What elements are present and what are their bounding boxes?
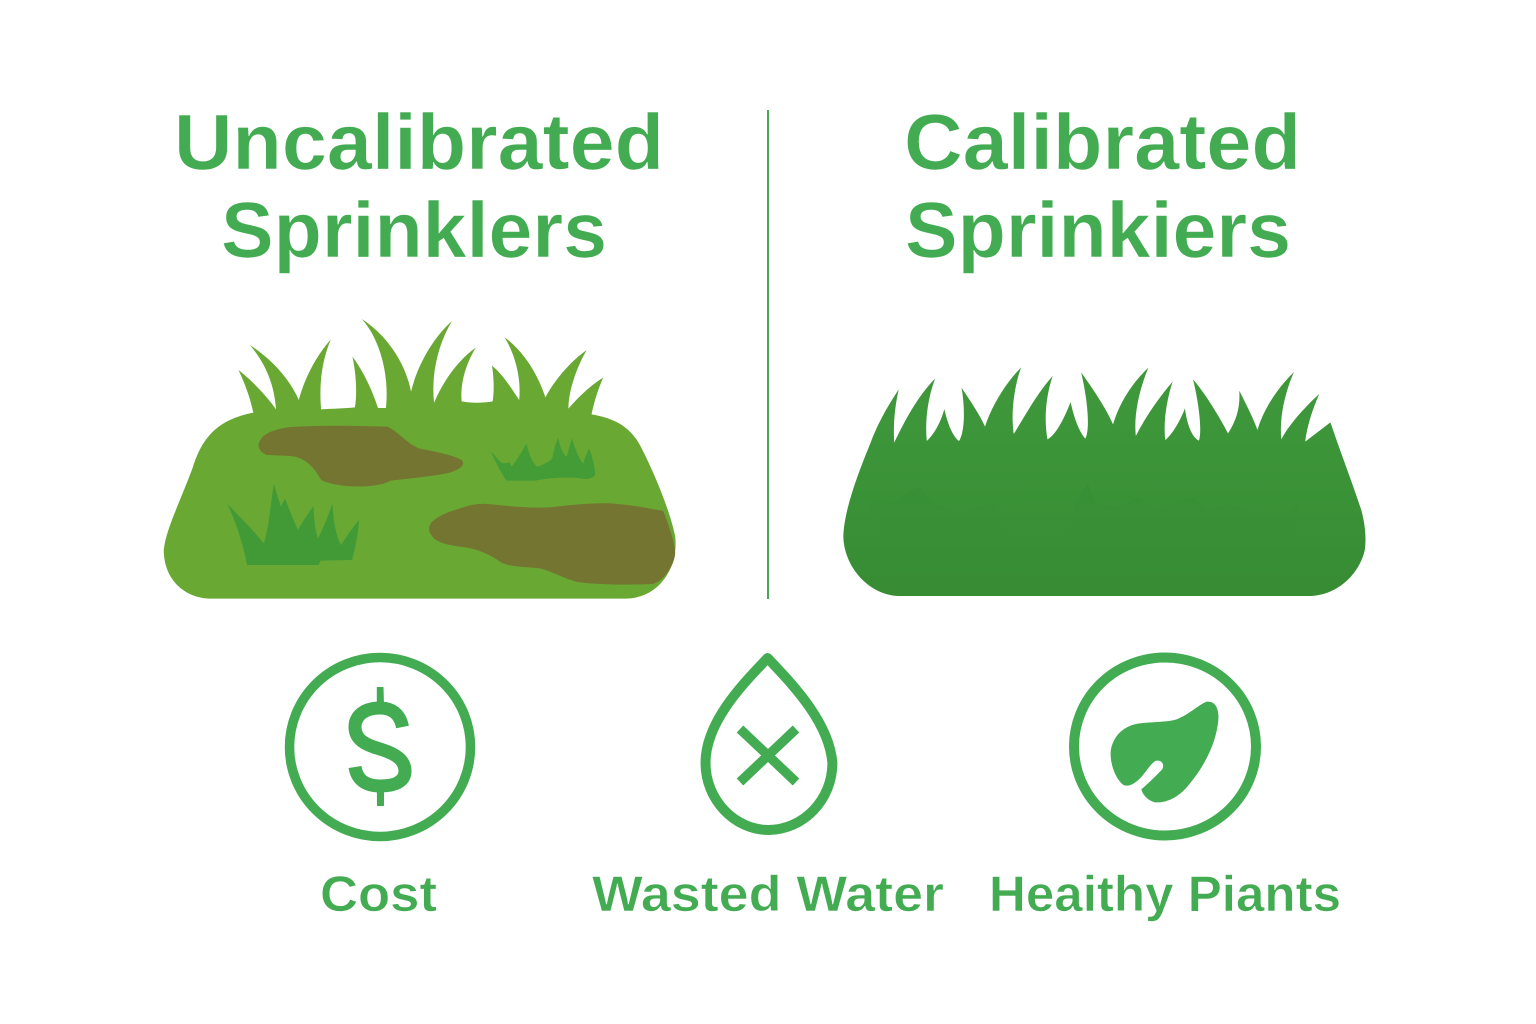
label: cost: Cost (320, 866, 437, 922)
healthy tuft small (491, 437, 595, 481)
center divider (767, 110, 769, 599)
illustration: lush calibrated lawn (843, 367, 1366, 596)
icon: wasted water drop (706, 658, 832, 830)
heading: calibrated sprinklers: Calibrated (904, 97, 1301, 186)
heading: calibrated sprinklers (904, 97, 1301, 274)
heading: uncalibrated sprinklers: Uncalibrated (174, 97, 664, 186)
icon: healthy plant leaf (1074, 658, 1256, 836)
bare soil patch bottom (429, 503, 675, 585)
label: wasted water: Wasted Water (592, 866, 944, 922)
heading: calibrated sprinklers: Sprinkiers (905, 185, 1291, 274)
label: healthy plants: Heaithy Piants (989, 866, 1341, 922)
lawn base with dense grass (843, 367, 1366, 596)
lawn base with sparse grass (164, 319, 676, 599)
heading: uncalibrated sprinklers (174, 97, 664, 274)
heading: uncalibrated sprinklers: Sprinklers (221, 185, 607, 274)
icon: dollar cost (290, 658, 470, 836)
illustration: patchy uncalibrated lawn (164, 319, 676, 599)
grass texture shading (869, 483, 1298, 547)
bare soil patch top (258, 426, 463, 486)
healthy tuft large (227, 483, 359, 565)
